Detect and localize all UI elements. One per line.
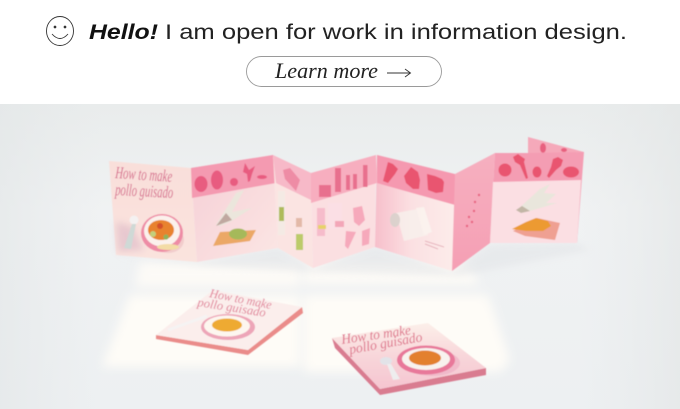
greeting word: Hello! [89,20,158,44]
book two bowl [397,346,460,376]
pot illustration [390,207,432,241]
learn more button [246,56,442,86]
panel: fold five [375,155,455,271]
book one bowl [201,314,255,340]
photo background [0,104,680,409]
book one title [196,286,273,320]
stacked book one [156,286,303,355]
spoon [124,216,138,249]
icon: arrow [387,69,410,77]
book one spoon [168,316,207,330]
cover shadow [116,222,144,252]
ingredient silhouettes [383,162,444,193]
book one title: pollo guisado [196,295,267,320]
cutting board [513,218,560,240]
ingredient silhouettes [194,163,267,192]
bowl [141,214,184,253]
pink ingredient band [191,155,276,198]
panel: fold three [273,155,313,268]
pantry icons [319,165,368,197]
headline text: I am open for work in information design. [165,20,627,44]
window light on table [102,262,510,372]
icon: smiley [46,16,74,46]
panel: cover [109,161,197,262]
meat pieces [345,206,370,249]
cutting board [213,230,256,246]
book two title: pollo guisado [347,330,424,358]
cover title: How to make [114,163,173,186]
book one title: How to make [207,286,273,312]
cover title: pollo guisado [114,180,174,202]
panel: ingredients two [490,152,584,243]
small notes [466,194,480,227]
cover title [114,163,174,202]
book two spoon [380,357,400,380]
ingredient silhouettes [498,154,579,179]
chopped orange vegetables [512,218,551,231]
skewer illustration [317,203,344,236]
book two title: How to make [340,323,412,348]
jars [278,191,303,250]
panel: ingredients one [191,155,278,262]
concertina book shadow [116,243,590,276]
stacked book two [332,323,486,395]
lemongrass [216,190,252,226]
pot caption [425,241,444,249]
lemongrass [516,184,557,213]
chopped herbs [229,228,247,240]
tin icon [283,168,300,191]
back flap [528,137,584,155]
concertina recipe book [109,137,584,271]
panel: pink fold six [452,153,495,271]
inner page [490,180,581,243]
panel: fold four [311,155,377,268]
button label: Learn more [274,58,378,83]
header message [46,16,627,46]
